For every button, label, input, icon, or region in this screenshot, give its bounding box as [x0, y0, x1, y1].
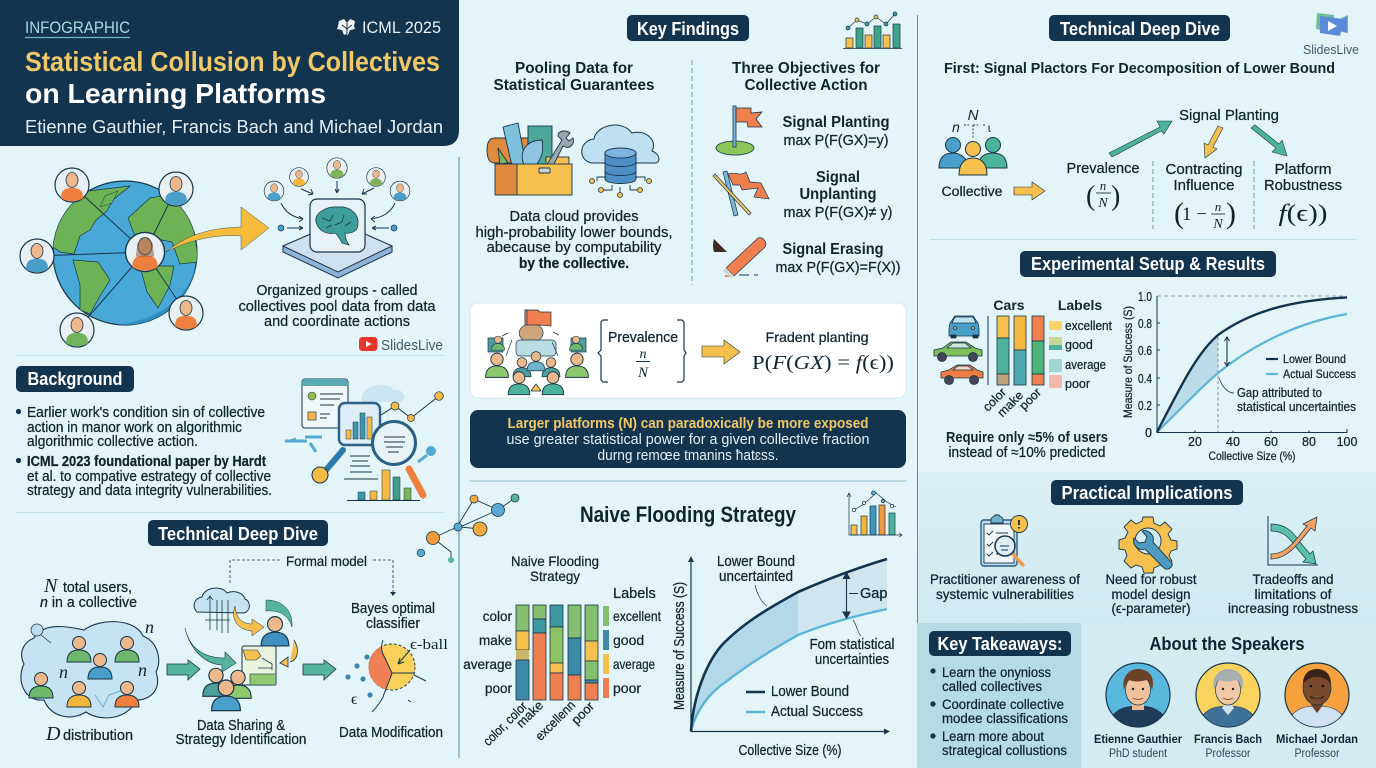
text: N total users: total users, [63, 580, 132, 596]
chart: stacked bars cars: poor [1017, 385, 1044, 413]
text: takeaway bullets: Learn more about [942, 729, 1044, 744]
annotation: formal model: Formal model [286, 553, 367, 569]
chart: measure of success: 0.2 [1138, 399, 1152, 413]
text: collective: Collective [942, 184, 1002, 199]
chart: stacked bars naive flooding: make [513, 698, 546, 731]
formula: gradient planting: Fradent planting [766, 329, 868, 345]
text: background bullets [16, 405, 272, 499]
panel: prevalence card [470, 303, 906, 398]
chart: measure of success: Collective Size (%) [1208, 449, 1296, 463]
text: signal planting [782, 114, 890, 149]
factor: contracting influence: Influence [1174, 177, 1234, 194]
legend: cars labels: good [1065, 338, 1093, 352]
text: background bullets: et al. to compative estrategy of collective [27, 469, 271, 485]
heading: technical deep dive right: Technical Deep Dive [1060, 19, 1220, 39]
logo: SlidesLive left [359, 337, 443, 354]
logo: SlidesLive left: SlidesLive [381, 338, 443, 354]
chart: measure of success: 100 [1337, 435, 1357, 449]
panel: right column lower background [917, 472, 1376, 768]
text: tradeoffs: Tradeoffs and [1252, 571, 1334, 587]
formula: gradient planting: P(F(GX) = f(ϵ)) [752, 352, 894, 374]
factor: contracting influence: 1 − [1182, 204, 1207, 225]
heading: about the speakers: About the Speakers [1150, 634, 1304, 654]
legend: labels naive flooding: average [613, 656, 655, 672]
text: organized groups: and coordinate actions [264, 314, 410, 330]
formula: prevalence bracket: n [640, 347, 646, 362]
heading: three objectives: Collective Action [744, 77, 868, 94]
text: background bullets: strategy and data integrity vulnerabilities. [27, 483, 272, 499]
text: background bullets: ICML 2023 foundational paper by Hardt [27, 454, 266, 470]
authors: Etienne Gauthier, Francis Bach and Michael Jordan [25, 117, 443, 137]
legend: cars labels: average [1065, 358, 1106, 372]
text: practitioner awareness: systemic vulnerabilities [936, 586, 1074, 602]
text: data cloud description: by the collective. [519, 256, 629, 272]
factor: contracting influence: ( [1174, 197, 1184, 230]
text: takeaway bullets: called collectives [942, 679, 1042, 694]
text: stacked chart title: Strategy [530, 568, 580, 584]
chart: lower bound versus actual success: uncertainties [815, 652, 889, 668]
text: tradeoffs: increasing robustness [1228, 600, 1358, 616]
factor: contracting influence [1166, 161, 1242, 232]
speaker: Etienne Gauthier [1094, 663, 1182, 760]
illustration: collective people: ɩ [988, 121, 991, 135]
text: signal unplanting [784, 169, 892, 221]
chart: stacked bars naive flooding [463, 605, 598, 749]
icon: findings chart [843, 12, 902, 48]
factor: prevalence: ) [1111, 181, 1120, 212]
text: require only [946, 430, 1108, 461]
callout: larger platforms: Larger platforms (N) can paradoxically be more exposed [508, 416, 868, 432]
illustration: analytics and magnifier [285, 379, 443, 500]
arrow: cloud to data sharing [167, 660, 200, 680]
text: cars and labels headers: Labels [1058, 297, 1102, 313]
panel: about the speakers [1081, 624, 1376, 768]
chart: measure of success: 0.6 [1138, 344, 1152, 358]
icon: signal erasing [713, 238, 766, 278]
text: background bullets: Earlier work's condition sin of collective [27, 405, 265, 421]
text: require only: instead of ≈10% predicted [948, 445, 1106, 461]
illustration: epsilon ball: ϵ-ball [410, 637, 448, 653]
chart: lower bound versus actual success: Collective Size (%) [738, 743, 842, 759]
heading: experimental setup: Experimental Setup & Results [1031, 254, 1265, 274]
text: cars and labels headers [993, 297, 1102, 313]
formula: prevalence bracket [598, 320, 686, 382]
illustration: user cloud [21, 617, 159, 718]
arrow: collective to platform [166, 207, 269, 252]
text: takeaway bullets [930, 665, 1068, 758]
text: stacked chart title [511, 553, 599, 584]
text: signal unplanting: Signal [816, 169, 860, 186]
text: background bullets: action in manor work on algorithmic [27, 420, 242, 436]
text: signal erasing: Signal Erasing [782, 241, 884, 258]
text: practitioner awareness [930, 571, 1080, 602]
text: require only: Require only ≈5% of users [946, 430, 1108, 446]
text: tradeoffs [1228, 571, 1358, 616]
formula: prevalence bracket: Prevalence [608, 330, 678, 346]
chart: measure of success: 80 [1302, 435, 1316, 449]
logo: SlidesLive right [1303, 13, 1359, 57]
icon: tradeoff chart [1268, 516, 1318, 565]
text: organized groups: collectives pool data from data [238, 299, 436, 315]
chart: stacked bars naive flooding: average [463, 657, 512, 672]
formula: prevalence bracket: N [637, 365, 649, 381]
speaker: Francis Bach: Francis Bach [1194, 732, 1262, 746]
heading: pooling data: Statistical Guarantees [494, 77, 655, 94]
chart: stacked bars naive flooding: make [479, 633, 512, 648]
chart: measure of success: Actual Success [1283, 367, 1356, 381]
arrows: factor links [1109, 121, 1287, 158]
chart: lower bound versus actual success: Lower Bound [771, 684, 849, 700]
text: data cloud description: Data cloud provides [510, 209, 638, 225]
speaker: Etienne Gauthier: Etienne Gauthier [1094, 732, 1182, 746]
decoration: network nodes [417, 494, 519, 563]
icon: small bar chart [847, 491, 902, 537]
text: N total users [40, 575, 137, 611]
chart: measure of success: 1.0 [1138, 290, 1152, 304]
speaker: Michael Jordan [1276, 663, 1358, 760]
arrow: collective to factors [1014, 182, 1045, 200]
callout: larger platforms: use greater statistical power for a given collective fraction [506, 432, 870, 448]
text: robust design: (ϵ-parameter) [1112, 600, 1190, 616]
chart: lower bound versus actual success: uncertainted [719, 569, 793, 585]
icon: ICML logo [337, 19, 355, 35]
heading: technical deep dive left: Technical Deep Dive [158, 524, 318, 544]
icon: gear and wrench [1119, 517, 1177, 573]
heading: naive flooding: Naive Flooding Strategy [580, 502, 797, 527]
text: data cloud description: high-probability lower bounds, [476, 225, 672, 241]
speaker: Etienne Gauthier: PhD student [1109, 748, 1168, 760]
chart: lower bound versus actual success: Measure of Success (S) [672, 582, 688, 710]
heading: three objectives [732, 60, 880, 94]
factor: platform robustness [1264, 161, 1342, 227]
text: organized groups: Organized groups - called [256, 283, 418, 299]
text: bayes classifier: Bayes optimal [351, 601, 435, 617]
factor: platform robustness: Robustness [1264, 177, 1342, 194]
chart: stacked bars cars [980, 316, 1044, 420]
illustration: user cloud: n [138, 660, 147, 680]
icon: data cloud [582, 125, 659, 198]
speaker: Michael Jordan: Michael Jordan [1276, 732, 1358, 746]
column separator right [916, 15, 918, 748]
chart: stacked bars cars: color [980, 385, 1009, 414]
text: robust design: Need for robust [1106, 571, 1197, 587]
illustration: data sharing and strategy [185, 588, 297, 711]
chart: measure of success: 40 [1226, 435, 1240, 449]
chart: measure of success: 0.8 [1138, 317, 1152, 331]
illustration: epsilon ball [345, 637, 448, 712]
text: stacked chart title: Naive Flooding [511, 553, 599, 569]
text: N total users: N [43, 575, 59, 597]
text: bayes classifier [351, 601, 435, 632]
chart: stacked bars naive flooding: color [483, 609, 512, 624]
legend: labels naive flooding: Labels [613, 586, 656, 602]
text: takeaway bullets: modee classifications [942, 711, 1068, 726]
text: background bullets: algorithmic collective action. [27, 434, 198, 450]
illustration: epsilon ball: ϵ [351, 691, 358, 708]
text: signal planting node: Signal Planting [1179, 107, 1279, 124]
legend: labels naive flooding: poor [613, 680, 641, 696]
text: data cloud description: abecause by computability [486, 240, 662, 256]
text: takeaway bullets: Coordinate collective [942, 697, 1064, 712]
text: robust design [1106, 571, 1197, 616]
chart: measure of success: Gap attributed to [1237, 386, 1322, 400]
factor: prevalence: N [1097, 196, 1108, 211]
speaker: Francis Bach [1194, 663, 1262, 760]
arrow: strategy to modification [303, 660, 336, 680]
chart: stacked bars naive flooding: excellenn [532, 698, 578, 743]
header banner [0, 0, 459, 146]
logo: SlidesLive right: SlidesLive [1303, 42, 1359, 57]
factor: contracting influence: N [1212, 217, 1223, 232]
factor: contracting influence: ) [1226, 197, 1236, 230]
arrow: prevalence to formula [702, 340, 740, 364]
illustration: collective people: n [952, 119, 960, 135]
annotation: formal model [230, 553, 396, 596]
speaker: Francis Bach: Professor [1206, 748, 1251, 760]
factor: contracting influence: n [1215, 199, 1221, 214]
icon: car fleet [934, 316, 983, 384]
chart: stacked bars naive flooding: poor [568, 698, 598, 728]
text: data cloud description [476, 209, 672, 272]
factor: prevalence: n [1100, 178, 1106, 193]
heading: background: Background [28, 369, 122, 389]
panel: key takeaways [917, 623, 1081, 768]
chart: measure of success: Lower Bound [1283, 352, 1346, 366]
chart: measure of success: statistical uncertainties [1237, 400, 1356, 414]
text: data sharing: Data Sharing & [197, 718, 285, 734]
heading: three objectives: Three Objectives for [732, 60, 880, 77]
text: bayes classifier: classifier [366, 616, 420, 632]
text: data modification: Data Modification [339, 725, 443, 741]
icon: signal unplanting flag [713, 171, 769, 216]
conference label: ICML 2025 [362, 18, 441, 37]
factor: prevalence [1066, 160, 1140, 212]
callout: larger platforms: durng remœe tmanins ħatɛss. [598, 448, 778, 464]
text: D distribution: distribution [63, 728, 133, 744]
text: N total users: n in a collective [40, 595, 137, 611]
legend: labels naive flooding: good [613, 632, 644, 648]
text: cars and labels headers: Cars [993, 297, 1025, 313]
heading: key takeaways: Key Takeaways: [938, 634, 1062, 654]
legend: cars labels [1049, 319, 1112, 391]
text: signal unplanting: max P(F(GX)≠ y) [784, 204, 892, 221]
chart: measure of success: 20 [1188, 435, 1202, 449]
text: organized groups [238, 283, 436, 330]
speaker: Michael Jordan: Professor [1294, 748, 1340, 760]
text: data sharing: Strategy Identification [176, 732, 306, 748]
text: takeaway bullets: strategical collustions [942, 743, 1067, 758]
text: signal erasing: max P(F(GX)=F(X)) [776, 259, 900, 276]
text: D distribution [45, 723, 133, 745]
chart: lower bound versus actual success: Actual Success [771, 704, 863, 720]
callout: larger platforms [470, 410, 906, 468]
illustration: globe with connected users [20, 168, 203, 347]
heading: pooling data: Pooling Data for [515, 60, 633, 77]
chart: measure of success [1121, 290, 1357, 463]
illustration: collective people: N [968, 107, 979, 124]
icon: signal planting flag [716, 106, 762, 155]
text: signal planting: max P(F(GX)=y) [784, 132, 888, 149]
text: takeaway bullets: Learn the onynioss [942, 665, 1051, 680]
text: signal erasing [776, 241, 900, 276]
text: signal unplanting: Unplanting [800, 186, 876, 203]
icon: clipboard audit [981, 515, 1028, 566]
label: infographic: INFOGRAPHIC [25, 18, 130, 37]
text: D distribution: D [45, 723, 61, 745]
legend: labels naive flooding: excellent [613, 608, 661, 624]
heading: background [16, 366, 134, 392]
title: Statistical Collusion by Collectives [25, 46, 440, 77]
illustration: user cloud: n [59, 662, 68, 682]
legend: cars labels: excellent [1065, 319, 1112, 333]
chart: stacked bars naive flooding: color, color [480, 698, 531, 749]
illustration: user cloud: n [145, 617, 154, 637]
factor: prevalence: ( [1086, 181, 1095, 212]
factor: platform robustness: Platform [1274, 161, 1332, 178]
chart: stacked bars naive flooding: poor [485, 681, 512, 696]
chart: measure of success: Measure of Success (S) [1121, 306, 1135, 418]
heading: key findings: Key Findings [637, 19, 739, 39]
title: on Learning Platforms [25, 78, 326, 109]
text: data sharing [176, 718, 306, 748]
formula: gradient planting [752, 329, 894, 374]
chart: measure of success: 0 [1145, 426, 1152, 440]
icon: toolbox [487, 123, 573, 195]
text: signal planting: Signal Planting [782, 114, 890, 131]
heading: practical implications: Practical Implications [1062, 483, 1232, 503]
title [25, 46, 440, 109]
chart: measure of success: 0.4 [1138, 372, 1152, 386]
factor: platform robustness: f(ϵ)) [1278, 201, 1328, 227]
legend: labels naive flooding [603, 586, 661, 698]
text: practitioner awareness: Practitioner awareness of [930, 571, 1080, 587]
illustration: learning platform with brain [264, 158, 410, 278]
chart: lower bound versus actual success: Lower Bound [717, 554, 795, 570]
illustration: collective around flag [486, 310, 588, 395]
chart: stacked bars cars: make [995, 388, 1026, 420]
factor: prevalence: Prevalence [1066, 160, 1140, 177]
text: robust design: model design [1112, 586, 1190, 602]
chart: lower bound versus actual success [672, 554, 894, 759]
legend: cars labels: poor [1065, 377, 1090, 391]
column separator left [458, 157, 460, 758]
illustration: collective people [939, 107, 1007, 175]
heading: pooling data [494, 60, 655, 94]
chart: lower bound versus actual success: Gap [860, 586, 887, 602]
factor: contracting influence: Contracting [1166, 161, 1242, 178]
chart: lower bound versus actual success: Fom statistical [810, 637, 894, 653]
subheading: decomposition: First: Signal Plactors For Decomposition of Lower Bound [944, 61, 1335, 77]
chart: measure of success: 60 [1264, 435, 1278, 449]
text: tradeoffs: limitations of [1254, 586, 1332, 602]
